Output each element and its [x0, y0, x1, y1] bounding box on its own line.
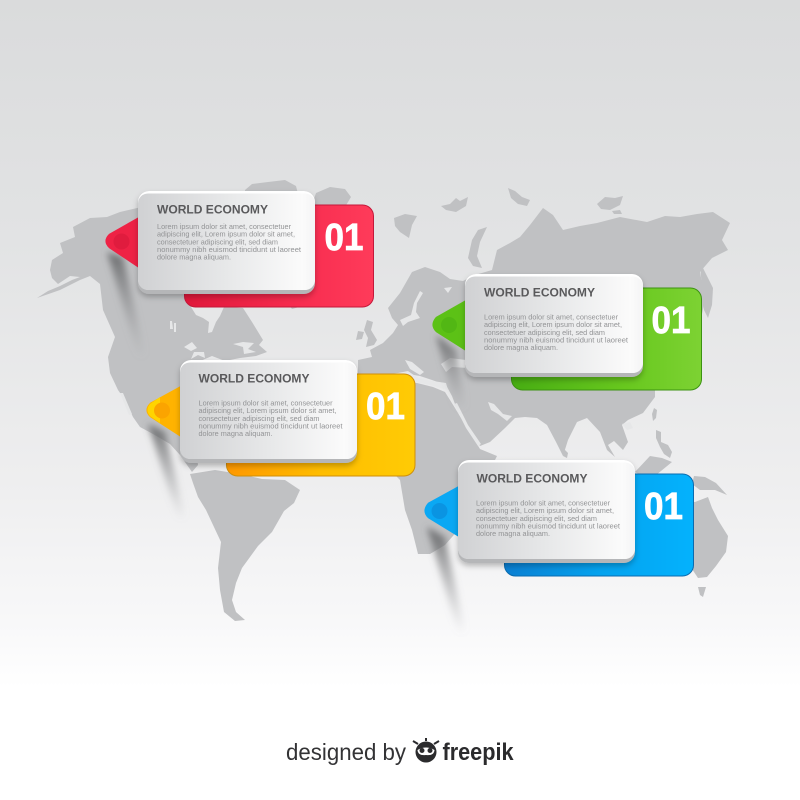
green body text	[484, 312, 629, 352]
map: United Kingdom	[364, 320, 377, 347]
icon: freepik mascot	[413, 738, 439, 762]
green pointer	[434, 301, 467, 350]
blue body text	[476, 498, 621, 538]
sea: Hudson Bay	[191, 307, 224, 333]
sea: White Sea	[444, 287, 452, 293]
sea: Gulf of Tonkin	[622, 422, 633, 430]
red number: 01	[324, 217, 364, 259]
map: Tasmania	[698, 587, 706, 597]
sea: Gulf of St Lawrence	[233, 342, 256, 354]
map: Sri Lanka	[563, 449, 568, 458]
yellow heading: WORLD ECONOMY	[198, 372, 310, 386]
red text panel	[138, 191, 315, 294]
blue body text: consectetuer adipiscing elit, sed diam	[476, 514, 597, 523]
red number panel	[184, 205, 374, 307]
yellow number panel	[226, 374, 415, 476]
card: red	[107, 191, 374, 307]
red body text: dolore magna aliquam.	[157, 253, 231, 262]
sea: Adriatic	[405, 360, 424, 375]
green body text: adipiscing elit, Lorem ipsum dolor sit amet,	[484, 320, 622, 329]
map: inland seas and lakes	[120, 287, 633, 446]
freepik wordmark: freepik	[442, 739, 514, 766]
yellow body text: dolore magna aliquam.	[198, 429, 272, 438]
yellow body text: consectetuer adipiscing elit, sed diam	[198, 414, 320, 423]
card: green	[434, 274, 702, 390]
green body text: Lorem ipsum dolor sit amet, consectetuer	[484, 312, 618, 322]
credit text: designed by	[286, 739, 406, 765]
blue body text: dolore magna aliquam.	[476, 529, 550, 538]
map: Novaya Zemlya north	[508, 188, 530, 206]
tail shadow: yellow pin	[148, 424, 186, 520]
red body text: Lorem ipsum dolor sit amet, consectetuer	[157, 222, 291, 231]
yellow number: 01	[366, 386, 405, 428]
map: Ireland	[356, 331, 364, 340]
map: Kamchatka strip	[700, 262, 713, 318]
green body text: nonummy nibh euismod tincidunt ut laoreet	[484, 336, 629, 344]
footer credit	[286, 738, 514, 766]
yellow body text: nonummy nibh euismod tincidunt ut laoreet	[198, 422, 343, 430]
green body text: dolore magna aliquam.	[484, 343, 558, 352]
red body text: nonummy nibh euismod tincidunt ut laoreet	[157, 245, 302, 254]
map: North America	[37, 200, 267, 472]
yellow text panel	[180, 360, 357, 463]
yellow body text: adipiscing elit, Lorem ipsum dolor sit amet,	[198, 406, 336, 415]
blue body text: nonummy nibh euismod tincidunt ut laoreet	[476, 522, 621, 530]
card: yellow	[148, 360, 415, 476]
map: Africa	[352, 380, 497, 554]
green number: 01	[652, 300, 690, 342]
sea: Red Sea	[454, 403, 481, 446]
sea: Mediterranean	[382, 371, 448, 390]
green text panel	[465, 274, 643, 377]
red heading: WORLD ECONOMY	[157, 202, 268, 216]
map: Japan	[652, 408, 657, 421]
sea: Arctic channels	[170, 321, 176, 332]
map: Greenland	[285, 187, 351, 309]
sea: Great Lakes	[184, 342, 205, 359]
blue heading: WORLD ECONOMY	[476, 472, 588, 486]
map: Franz Josef Land	[441, 197, 468, 212]
map: New Siberian Islands	[597, 196, 623, 210]
green number panel	[512, 288, 702, 390]
map: Novaya Zemlya strip	[468, 227, 487, 268]
blue number: 01	[644, 486, 683, 528]
blue body text: adipiscing elit, Lorem ipsum dolor sit amet,	[476, 506, 614, 515]
tail shadow: red pin	[107, 252, 146, 358]
red body text: consectetuer adipiscing elit, sed diam	[157, 237, 278, 246]
map: New Guinea	[692, 476, 727, 495]
map: Eurasia	[358, 208, 730, 457]
sea: Black Sea	[441, 358, 468, 372]
map: Philippines	[656, 430, 672, 458]
sea: Persian Gulf	[488, 402, 512, 421]
map: South America	[190, 470, 300, 621]
map: Indonesia	[635, 456, 672, 480]
blue pointer	[426, 487, 460, 536]
map: Arctic islands	[245, 180, 298, 194]
red body text: adipiscing elit, Lorem ipsum dolor sit amet,	[157, 230, 295, 239]
yellow body text	[198, 398, 343, 438]
yellow pointer	[148, 387, 182, 436]
red pointer	[107, 218, 140, 267]
green body text: consectetuer adipiscing elit, sed diam	[484, 328, 605, 337]
blue number panel	[504, 474, 694, 576]
tail shadow: green pin	[436, 335, 466, 410]
map: Arctic fragment	[612, 210, 622, 214]
blue text panel	[458, 460, 635, 563]
sea: Baja gulf	[120, 393, 132, 415]
map: Svalbard	[394, 214, 417, 238]
blue body text: Lorem ipsum dolor sit amet, consectetuer	[476, 498, 610, 508]
red body text	[157, 222, 302, 262]
tail shadow: blue pin	[427, 527, 466, 634]
sea: Baltic	[400, 291, 423, 326]
card: blue	[426, 460, 694, 576]
map: Australia	[640, 497, 728, 578]
green heading: WORLD ECONOMY	[484, 286, 595, 300]
world map	[37, 180, 730, 621]
yellow body text: Lorem ipsum dolor sit amet, consectetuer	[198, 398, 333, 408]
